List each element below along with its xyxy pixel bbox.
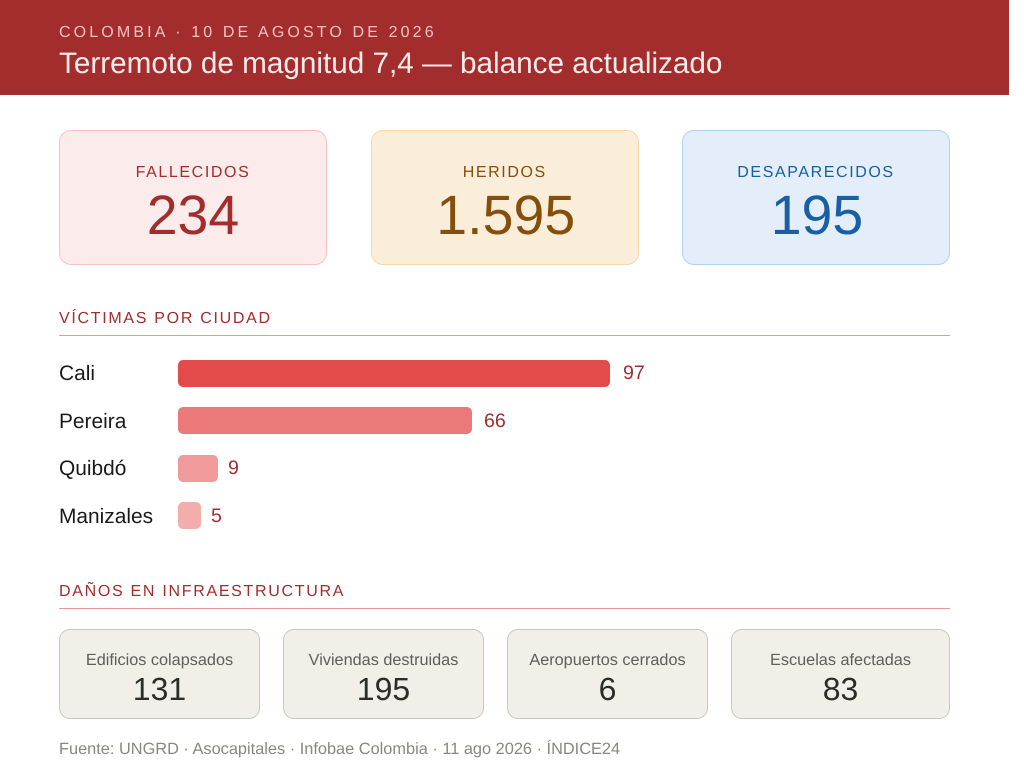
panel: fallecidos — [59, 130, 327, 265]
heading: victims by city: VÍCTIMAS POR CIUDAD — [59, 310, 272, 327]
row: Pereira: Pereira — [59, 410, 126, 433]
source footnote: Fuente: UNGRD · Asocapitales · Infobae Colombia · 11 ago 2026 · ÍNDICE24 — [59, 740, 620, 758]
label: edificios: Edificios colapsados — [86, 650, 233, 668]
panel: escuelas afectadas — [731, 629, 950, 719]
row: Manizales: Manizales — [59, 505, 153, 528]
number: heridos: 1.595 — [436, 184, 575, 246]
panel: edificios colapsados — [59, 629, 260, 719]
title: Terremoto de magnitud 7,4 — balance actualizado — [59, 47, 722, 80]
row: Pereira: 66 — [484, 410, 506, 432]
number: fallecidos: 234 — [147, 184, 239, 246]
row: Manizales — [59, 502, 222, 529]
label: desaparecidos: DESAPARECIDOS — [737, 164, 895, 180]
row: Cali — [59, 360, 645, 387]
number: escuelas: 83 — [823, 670, 858, 706]
label: heridos: HERIDOS — [463, 164, 547, 180]
overline: country and date: COLOMBIA · 10 DE AGOSTO DE 2026 — [59, 24, 437, 41]
row: Cali: Cali — [59, 362, 95, 385]
row: Manizales: 5 — [211, 504, 222, 526]
row: Quibdó: 9 — [228, 456, 239, 478]
number: aeropuertos: 6 — [599, 670, 616, 706]
row: Quibdó: Quibdó — [59, 457, 126, 480]
row: Quibdó — [59, 455, 239, 482]
label: aeropuertos: Aeropuertos cerrados — [529, 650, 686, 668]
header banner — [0, 0, 1009, 95]
label: fallecidos: FALLECIDOS — [136, 164, 250, 180]
row: Cali: 97 — [623, 362, 645, 384]
row: Pereira — [59, 407, 506, 434]
number: desaparecidos: 195 — [771, 184, 863, 246]
panel: desaparecidos — [682, 130, 950, 265]
label: viviendas: Viviendas destruidas — [309, 650, 458, 668]
number: edificios: 131 — [133, 670, 186, 706]
panel: aeropuertos cerrados — [507, 629, 708, 719]
heading: infrastructure damage: DAÑOS EN INFRAESTRUCTURA — [59, 583, 345, 600]
panel: heridos — [371, 130, 638, 265]
number: viviendas: 195 — [357, 670, 410, 706]
label: escuelas: Escuelas afectadas — [770, 650, 911, 668]
panel: viviendas destruidas — [283, 629, 484, 719]
chart: victims by city — [59, 360, 645, 529]
